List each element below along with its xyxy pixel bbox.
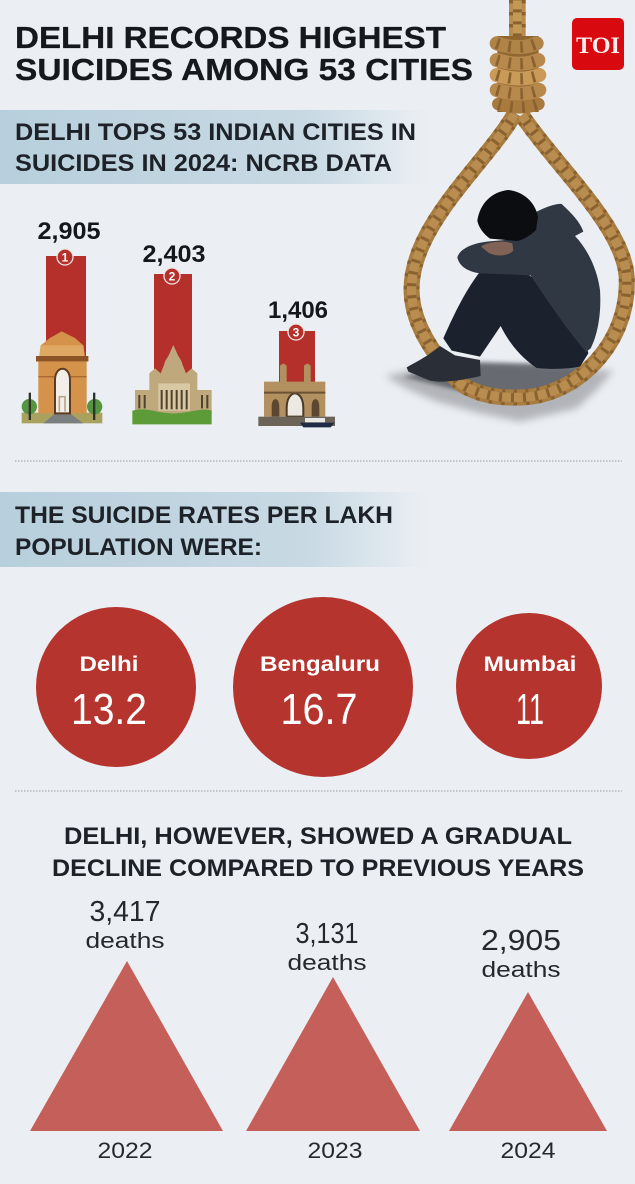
heading: section three: DELHI, HOWEVER, SHOWED A GRADUAL [64,823,572,850]
icon: India Gate [22,331,102,423]
bar two: Bengaluru: 2,403 [142,241,206,268]
bar one: Delhi: 1 [62,250,69,264]
bar two: Bengaluru: 2 [169,270,176,284]
heading: section three [52,823,584,882]
heading: section three: DECLINE COMPARED TO PREVIOUS YEARS [52,855,584,882]
bar three: Mumbai: 1,406 [268,297,328,324]
rope top strand [492,0,542,43]
circle stat: Delhi: Delhi [80,653,138,676]
heading: section one: DELHI TOPS 53 INDIAN CITIES IN [15,119,416,146]
circle stat: Bengaluru: Bengaluru [260,653,380,676]
heading: section one [15,119,416,177]
logo: TOI: TOI [576,33,620,58]
triangle chart: 2023: 2023 [308,1138,362,1163]
heading: section two: POPULATION WERE: [15,534,262,561]
heading: section two: THE SUICIDE RATES PER LAKH [15,502,393,529]
bar chart: suicides by city [22,218,335,427]
bar one: Delhi: 2,905 [38,218,100,245]
bar three: Mumbai [268,297,328,391]
circle stat: Delhi: 13.2 [71,685,147,734]
logo: TOI [572,18,624,70]
circle stat: Mumbai: Mumbai [484,653,576,676]
rope noose loop [412,113,627,398]
person: hooded jacket [457,204,600,352]
person: shoes [407,346,481,382]
person: legs [443,272,588,369]
triangle chart: 2022: deaths [86,928,164,953]
ground shadow [385,363,613,422]
circle stat: Delhi [36,607,196,767]
circle stat: Mumbai [456,613,602,759]
bar three: Mumbai: 3 [293,326,300,340]
band: section one heading background [0,110,428,184]
person: head and hair [477,190,538,241]
circle stat: Mumbai: 11 [516,685,544,734]
heading: section two [15,502,393,561]
triangle chart: 2024: deaths [482,957,560,982]
illustration: person sitting inside a rope noose [385,0,627,422]
triangle chart: 2022 [30,896,223,1163]
circle stat: Bengaluru: 16.7 [280,685,358,734]
circle stat: Bengaluru [233,597,413,777]
triangle chart: 2023: 3,131 [296,918,358,950]
title [15,20,473,87]
triangle chart: 2024: 2,905 [481,925,561,957]
triangle chart: 2022: 3,417 [90,896,160,928]
icon: Gateway of India [258,363,335,427]
band: section two heading background [0,492,428,567]
triangle chart: 2022: 2022 [98,1138,152,1163]
heading: section one: SUICIDES IN 2024: NCRB DATA [15,150,392,177]
triangle chart: 2024: 2024 [500,1138,556,1163]
bar one: Delhi [38,218,100,366]
triangle chart: 2023: deaths [288,950,366,975]
title: DELHI RECORDS HIGHEST [15,20,446,55]
triangle chart: 2024 [449,925,607,1163]
bar two: Bengaluru [142,241,206,384]
icon: Bengaluru Vidhana Soudha [132,345,212,424]
person: hand [481,242,513,256]
title: SUICIDES AMONG 53 CITIES [15,52,473,87]
triangle chart: 2023 [246,918,420,1163]
rope knot [497,36,539,112]
